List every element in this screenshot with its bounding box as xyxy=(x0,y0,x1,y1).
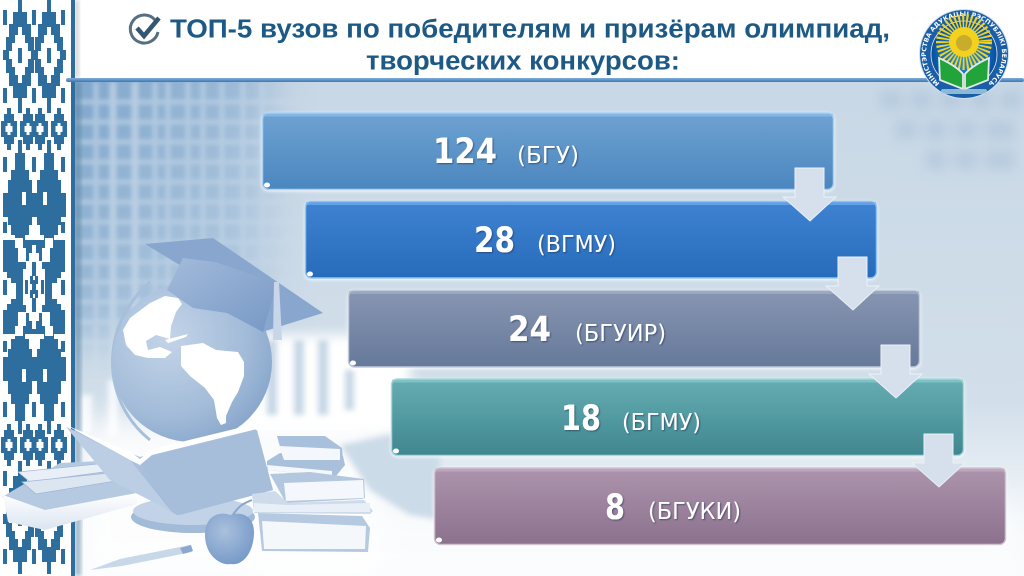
bar 4: БГМУ: (БГМУ) xyxy=(622,410,701,436)
right book stack xyxy=(252,436,373,552)
icon: check mark xyxy=(130,15,159,43)
white glow behind the books xyxy=(240,335,410,435)
header rule xyxy=(66,78,1024,82)
title: творческих конкурсов: xyxy=(366,48,680,76)
pencil xyxy=(90,545,193,570)
emblem green book xyxy=(939,58,989,89)
bar 4: БГМУ: 18 xyxy=(561,399,601,439)
open book xyxy=(66,424,273,515)
bar 5: БГУКИ: 8 xyxy=(605,488,625,528)
bar 1: БГУ: 124 xyxy=(433,132,497,172)
bar 5: БГУКИ: (БГУКИ) xyxy=(648,499,741,525)
arrow 3 xyxy=(869,345,922,398)
globe xyxy=(112,282,272,442)
globe stand arc xyxy=(112,282,150,440)
base disc xyxy=(131,501,255,533)
central woven motif xyxy=(3,240,65,334)
bar 3: БГУИР: (БГУИР) xyxy=(575,321,666,347)
bar 5: БГУКИ xyxy=(434,468,1006,544)
bar 2: ВГМУ: (ВГМУ) xyxy=(537,232,616,258)
graduation cap xyxy=(145,238,323,340)
emblem: ministry of education xyxy=(919,9,1009,99)
left ornament strip xyxy=(0,0,81,576)
bar 3: БГУИР xyxy=(348,290,920,367)
arrow 1 xyxy=(783,168,836,221)
left book stack xyxy=(2,460,137,530)
bar 2: ВГМУ: 28 xyxy=(474,221,515,261)
continents xyxy=(123,296,244,425)
emblem ring text: МІНІСТЭРСТВА АДУКАЦЫІ РЭСПУБЛІКІ БЕЛАРУСЬ xyxy=(921,11,1007,86)
title: ТОП-5 вузов по победителям и призёрам олимпиад, xyxy=(170,16,890,44)
header band xyxy=(75,0,1024,79)
bar 2: ВГМУ xyxy=(306,202,876,278)
illustration: globe, cap, books, apple, pencil xyxy=(2,238,373,570)
title xyxy=(170,16,890,76)
bar 1: БГУ xyxy=(262,113,834,190)
bar 4: БГМУ xyxy=(392,379,964,456)
bar 3: БГУИР: 24 xyxy=(508,310,551,350)
background: slide backdrop xyxy=(75,79,1024,535)
arrow 2 xyxy=(826,257,879,310)
arrow 4 xyxy=(912,434,965,487)
apple xyxy=(205,500,254,564)
emblem sun xyxy=(943,21,985,63)
bar 1: БГУ: (БГУ) xyxy=(517,143,579,169)
